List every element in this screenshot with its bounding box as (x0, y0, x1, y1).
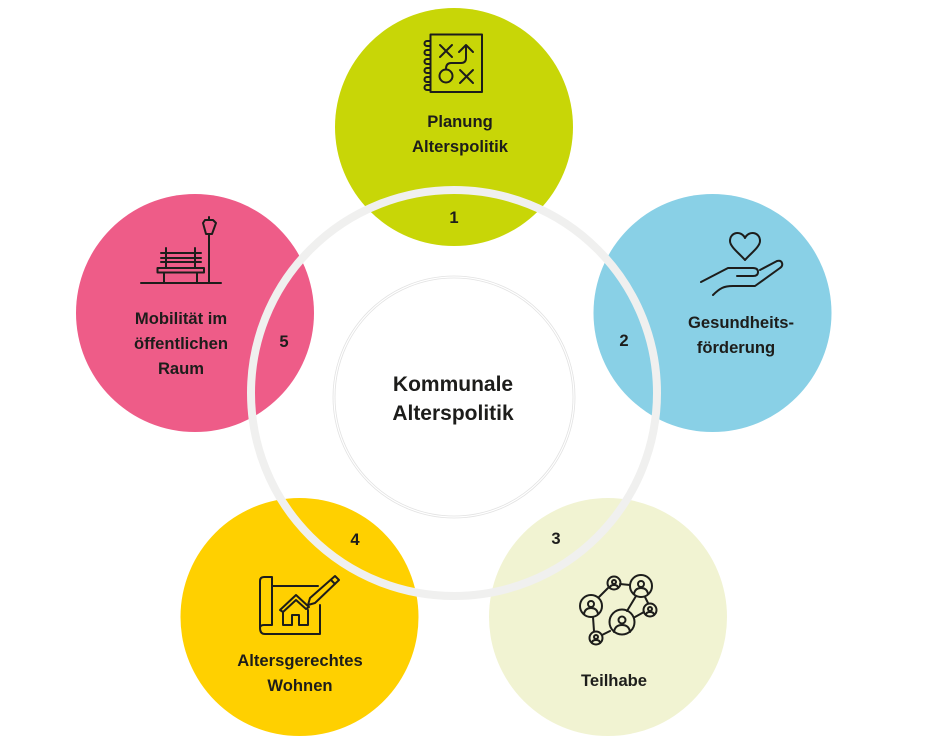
inner circle outline (333, 276, 575, 518)
icon: heart on hand (701, 233, 782, 295)
label: Planung Alterspolitik: Planung (427, 112, 493, 131)
label: Altersgerechtes Wohnen: Altersgerechtes (237, 651, 363, 670)
icon: people network (580, 575, 656, 644)
circle 2: Gesundheitsförderung (594, 194, 832, 432)
label: Altersgerechtes Wohnen: Wohnen (267, 676, 333, 695)
label: Mobilität im öffentlichen Raum: Mobilität im (135, 309, 227, 328)
icon: house plan and pencil (260, 576, 339, 634)
label: Mobilität im öffentlichen Raum: Raum (158, 359, 204, 378)
icon: bench and street lamp (141, 217, 221, 283)
label: Gesundheitsförderung: Gesundheits- (688, 313, 794, 332)
number 1: 1 (449, 208, 459, 227)
number 5: 5 (279, 332, 289, 351)
number 3: 3 (551, 529, 561, 548)
circle 4: Altersgerechtes Wohnen (180, 498, 418, 736)
circle 1: Planung Alterspolitik (335, 8, 573, 246)
center title: Kommunale (393, 373, 513, 396)
number 4: 4 (350, 530, 360, 549)
outer connecting ring (251, 190, 657, 596)
icon: strategy notebook (424, 34, 482, 92)
label: Teilhabe: Teilhabe (581, 671, 647, 690)
circle 3: Teilhabe (489, 498, 727, 736)
label: Planung Alterspolitik: Alterspolitik (412, 137, 509, 156)
label: Gesundheitsförderung: förderung (697, 338, 775, 357)
number 2: 2 (619, 331, 629, 350)
circle 5: Mobilität im öffentlichen Raum (76, 194, 314, 432)
center title: Alterspolitik (392, 402, 514, 425)
label: Mobilität im öffentlichen Raum: öffentlichen (134, 334, 228, 353)
